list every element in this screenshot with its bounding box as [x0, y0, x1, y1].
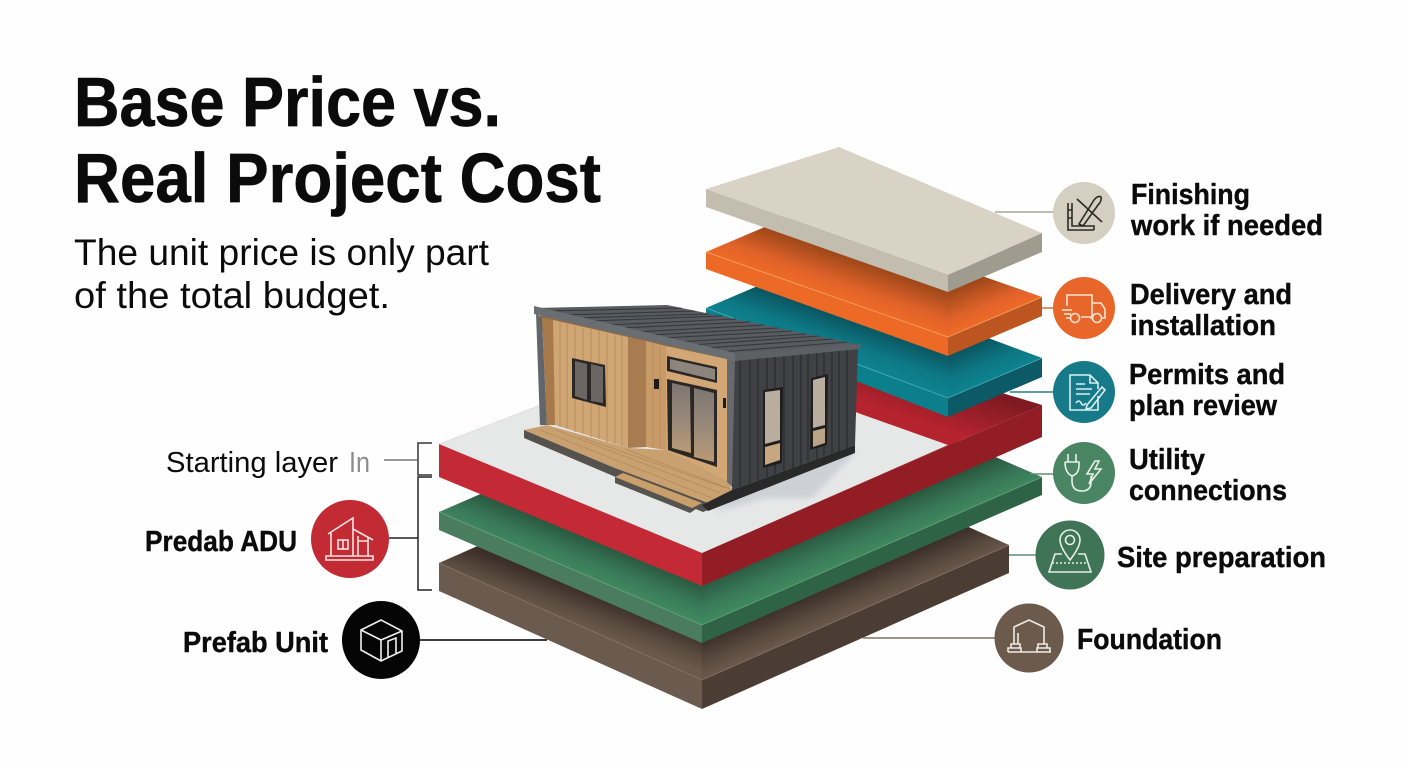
house model [524, 305, 861, 513]
roof [534, 305, 861, 361]
label: delivery and installation: installation [1130, 310, 1276, 342]
layer: finishing slab [706, 147, 1042, 292]
sliding door [654, 356, 726, 467]
wood front wall [536, 312, 735, 480]
label: utility connections [1053, 442, 1287, 507]
label: finishing work: Finishing [1131, 179, 1250, 211]
icon: foundation frame [994, 604, 1064, 672]
label: starting layer: Starting layer [166, 447, 338, 479]
deck [524, 425, 733, 513]
label: permits and plan review: Permits and [1129, 359, 1285, 391]
title [74, 63, 601, 217]
subtitle: of the total budget. [74, 275, 390, 316]
label: permits and plan review: plan review [1129, 390, 1277, 422]
label: predab ADU [145, 500, 389, 578]
icon: plug and bolt [1053, 442, 1115, 504]
label: finishing work: work if needed [1130, 210, 1323, 242]
label: utility connections: Utility [1129, 444, 1205, 476]
label: foundation: Foundation [1077, 624, 1222, 656]
side windows [763, 374, 828, 468]
icon: ruler and pencil [1053, 182, 1115, 244]
label: starting layer: In [349, 447, 370, 479]
label: utility connections: connections [1129, 475, 1287, 507]
icon: house [311, 500, 389, 578]
label: delivery and installation: Delivery and [1130, 279, 1292, 311]
label: delivery and installation [1053, 277, 1292, 342]
icon: document and pen [1053, 361, 1115, 423]
subtitle: The unit price is only part [74, 232, 490, 273]
icon: truck [1053, 277, 1115, 339]
label: permits and plan review [1053, 359, 1285, 423]
dark side wall [702, 348, 858, 511]
label: foundation [994, 604, 1222, 672]
label: finishing work [1053, 179, 1323, 244]
label: site preparation [1036, 520, 1326, 590]
connector lines and brackets left [384, 443, 547, 640]
layer: permits slab [706, 268, 1042, 417]
icon: box unit [342, 601, 420, 679]
layer: prefab ADU base slab [439, 320, 1042, 586]
title: Base Price vs. [74, 63, 501, 141]
icon: map pin [1036, 520, 1104, 590]
title: Real Project Cost [74, 139, 601, 217]
label: prefab unit: Prefab Unit [183, 627, 328, 659]
label: predab ADU: Predab ADU [145, 526, 297, 558]
front window [572, 358, 606, 407]
layer: foundation slab [439, 428, 1009, 709]
connector lines right [863, 212, 1054, 638]
label: site preparation: Site preparation [1117, 542, 1326, 574]
layer: delivery slab [706, 212, 1042, 356]
subtitle [74, 232, 490, 316]
label: prefab unit [183, 601, 420, 679]
layer: site preparation slab [439, 364, 1042, 643]
